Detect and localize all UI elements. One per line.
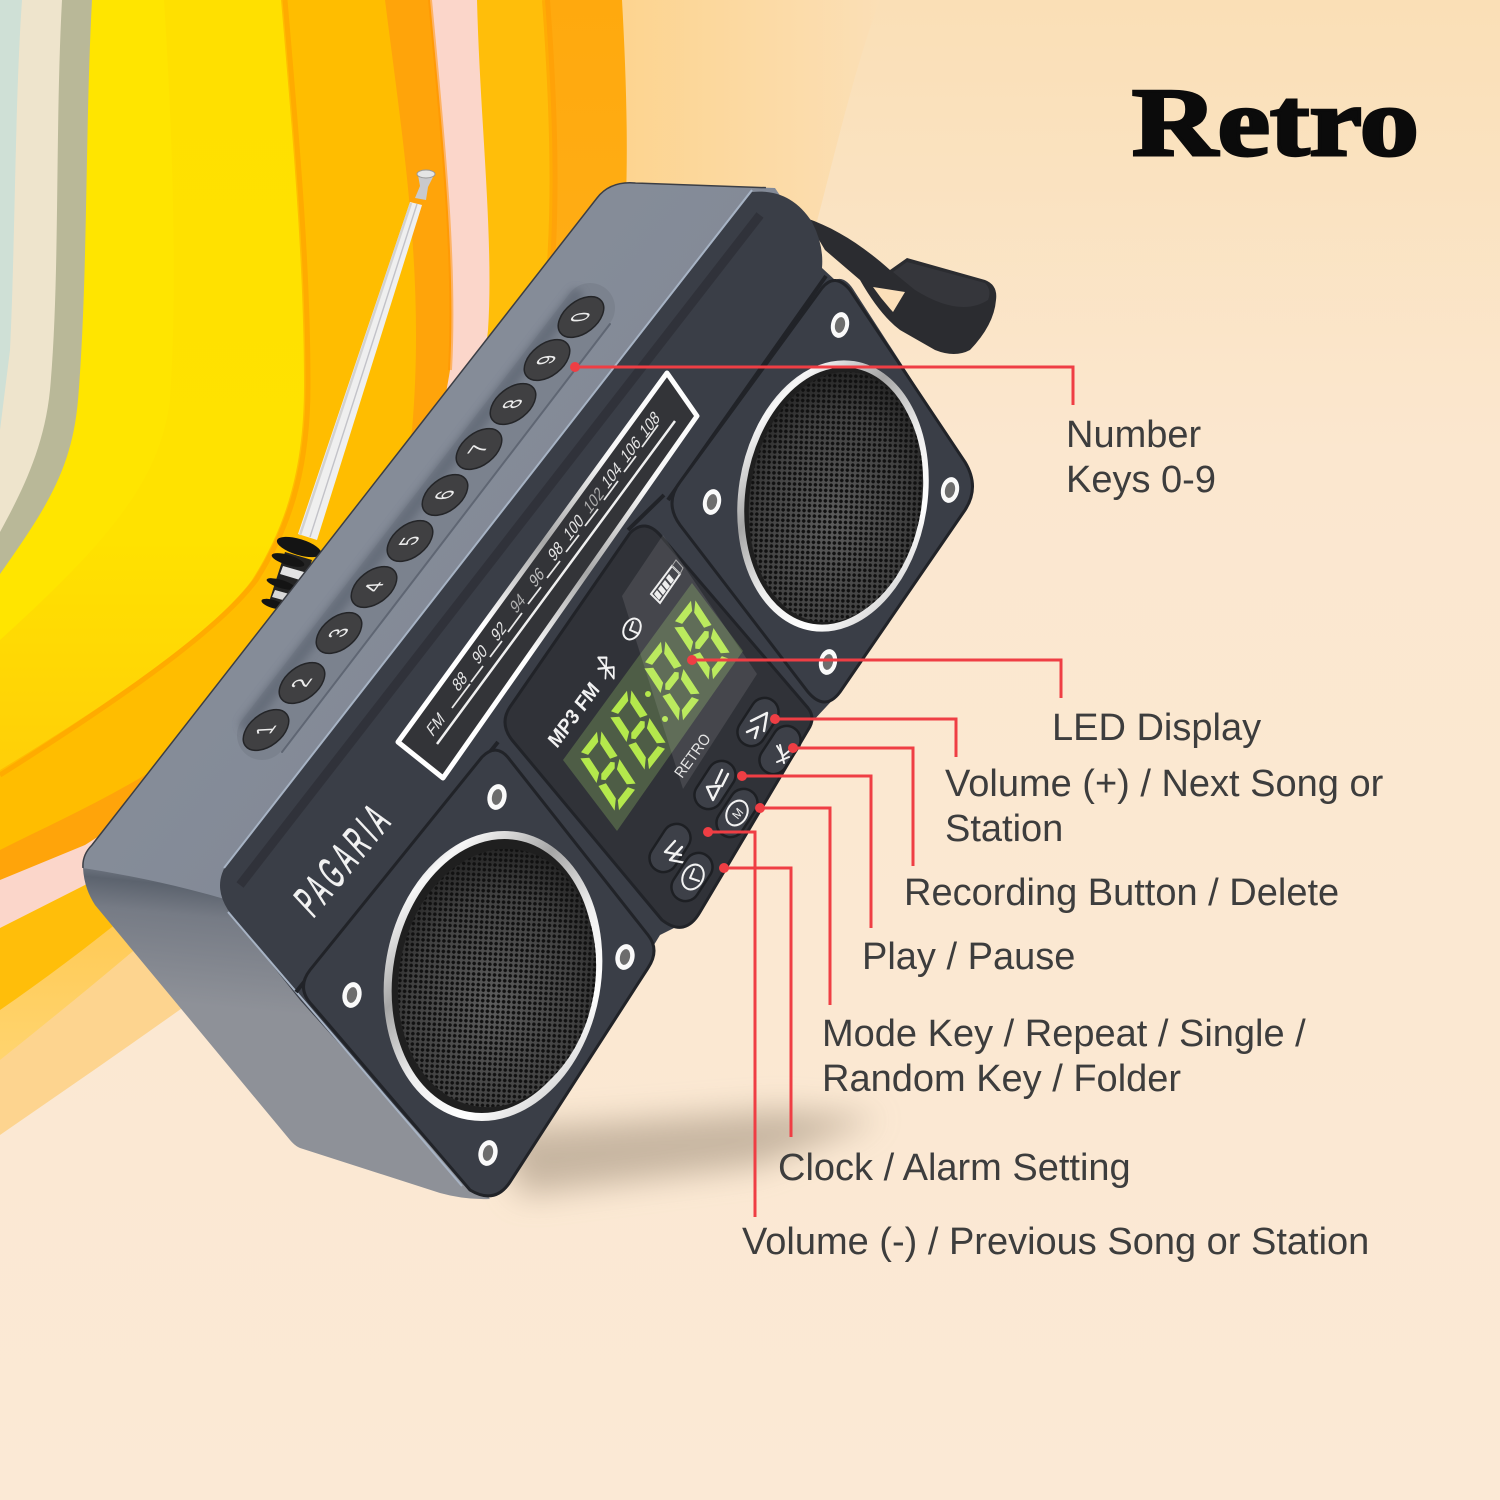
key 6 xyxy=(415,466,475,524)
keypad channel xyxy=(262,308,590,735)
icon: clock xyxy=(620,616,644,642)
key 4 xyxy=(344,558,404,616)
top strip inner shadow xyxy=(240,215,760,885)
body side xyxy=(83,868,490,1199)
callout: volume minus xyxy=(703,827,1369,1263)
screws xyxy=(340,782,637,1168)
callout: mode key xyxy=(755,803,1306,1100)
lower speaker xyxy=(303,750,654,1196)
button: mode xyxy=(711,784,763,842)
upper speaker grille xyxy=(731,359,941,635)
button: play pause xyxy=(689,756,741,814)
callout: clock alarm xyxy=(719,863,1131,1189)
brand name: PAGARIA xyxy=(287,792,401,926)
label: LED display: LED Display xyxy=(1052,707,1261,749)
light edge of front face xyxy=(224,190,752,1186)
callout: number keys xyxy=(570,362,1216,501)
dial numbers: FM xyxy=(425,709,448,741)
key 7: 7 xyxy=(461,443,495,455)
button: clock xyxy=(666,848,718,906)
label: volume minus: Volume (-) / Previous Song or Station xyxy=(742,1221,1369,1263)
upper speaker panel xyxy=(672,280,972,702)
dial numbers: 98 xyxy=(546,538,566,566)
upper speaker xyxy=(672,280,972,702)
LED green window xyxy=(563,583,743,831)
lower speaker panel xyxy=(303,750,654,1196)
LED digits 88:88 xyxy=(578,598,732,814)
key 3: 3 xyxy=(321,627,355,639)
dial numbers: 100 xyxy=(562,511,587,545)
FM tuning dial xyxy=(398,373,697,778)
callout: volume plus xyxy=(770,714,1384,850)
front face xyxy=(220,192,972,1196)
number keys 0-9 xyxy=(236,288,611,759)
label: number keys: Keys 0-9 xyxy=(1066,459,1216,501)
display panel xyxy=(505,526,812,927)
button: volume down / previous xyxy=(644,819,696,877)
callout: recording xyxy=(788,743,1339,914)
key 0 xyxy=(551,288,611,346)
body top surface xyxy=(83,183,800,900)
title: Retro xyxy=(1132,69,1419,177)
label: number keys: Number xyxy=(1066,414,1201,456)
label: play pause: Play / Pause xyxy=(862,936,1075,978)
keypad channel shading xyxy=(247,296,576,724)
upper speaker grille holes xyxy=(731,359,941,635)
button: recording / delete xyxy=(754,721,806,779)
screws xyxy=(700,310,962,677)
groove under top strip xyxy=(296,276,826,992)
key 9 xyxy=(517,331,577,389)
key 9: 9 xyxy=(529,354,563,366)
dial numbers: 102 xyxy=(582,484,607,518)
label: volume plus: Station xyxy=(945,808,1063,850)
key 3 xyxy=(309,604,369,662)
key 6: 6 xyxy=(427,489,461,501)
display panel base xyxy=(505,526,812,927)
key 8 xyxy=(483,375,543,433)
icon: bluetooth xyxy=(594,652,618,684)
icon: battery xyxy=(651,560,683,603)
label: clock alarm: Clock / Alarm Setting xyxy=(778,1147,1131,1189)
key 4: 4 xyxy=(356,581,391,593)
dial numbers: 104 xyxy=(600,459,625,493)
RETRO label: RETRO xyxy=(671,731,715,781)
button: mode: M xyxy=(729,805,746,822)
label: recording: Recording Button / Delete xyxy=(904,872,1339,914)
display glare xyxy=(622,535,757,789)
upper speaker chrome ring xyxy=(722,350,944,642)
dial numbers: 106 xyxy=(619,433,644,467)
callout: play pause xyxy=(737,771,1075,978)
antenna rod xyxy=(298,202,422,540)
dial underscores xyxy=(452,425,658,708)
dial numbers: 94 xyxy=(508,590,528,618)
label: mode key: Random Key / Folder xyxy=(822,1058,1181,1100)
dial numbers: 108 xyxy=(638,408,663,442)
radio device xyxy=(83,170,996,1199)
callout: LED display xyxy=(687,655,1261,749)
antenna base rings xyxy=(260,533,323,611)
key 1: 1 xyxy=(248,724,282,736)
lower speaker grille xyxy=(378,833,616,1123)
lower speaker grille holes xyxy=(378,833,616,1123)
key 0: 0 xyxy=(563,311,597,323)
label: mode key: Mode Key / Repeat / Single / xyxy=(822,1013,1306,1055)
lower speaker chrome ring xyxy=(366,818,620,1134)
key 7 xyxy=(449,420,509,478)
antenna xyxy=(260,170,435,611)
dial numbers: 88 xyxy=(450,668,470,696)
shadow under radio xyxy=(500,1110,880,1195)
key 2: 2 xyxy=(284,677,318,689)
MP3 FM label: MP3 FM xyxy=(544,678,604,752)
background: flowing colour waves xyxy=(0,0,880,1135)
dial numbers xyxy=(425,408,663,741)
key 8: 8 xyxy=(495,398,529,410)
button: volume up / next xyxy=(732,693,784,751)
dial scale line xyxy=(437,421,675,744)
dial numbers: 96 xyxy=(527,564,547,592)
key 5 xyxy=(380,512,440,570)
control buttons xyxy=(644,693,806,906)
label: volume plus: Volume (+) / Next Song or xyxy=(945,763,1383,805)
dial numbers: 90 xyxy=(470,641,490,669)
carry strap xyxy=(806,218,996,354)
keypad channel lower edge xyxy=(282,324,610,752)
key 5: 5 xyxy=(392,535,426,547)
key 1 xyxy=(236,701,296,759)
dial numbers: 92 xyxy=(489,618,509,646)
key 2 xyxy=(272,654,332,712)
